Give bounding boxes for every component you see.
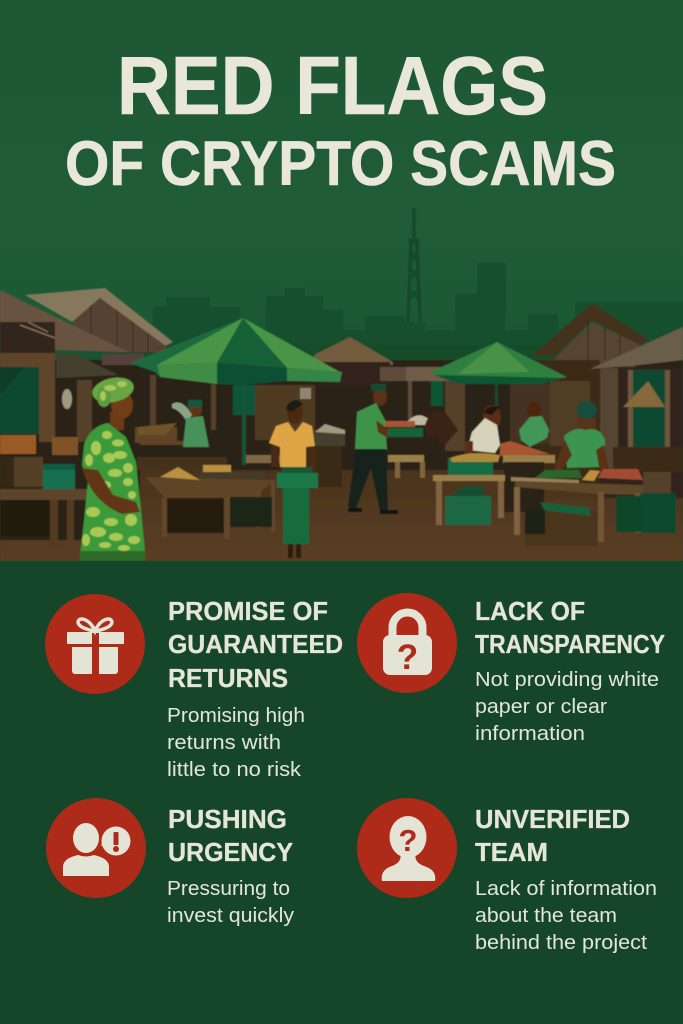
icon: person with alert (46, 798, 146, 898)
centre stall (312, 337, 465, 487)
market scene (0, 208, 683, 561)
icon: padlock (357, 593, 457, 693)
right house (510, 303, 649, 490)
right front house (590, 327, 683, 498)
heading (475, 804, 630, 867)
description: invest quickly (167, 905, 294, 927)
title line 2: OF CRYPTO SCAMS (65, 129, 616, 199)
heading (168, 804, 293, 867)
description (475, 878, 657, 954)
left crates (0, 435, 88, 548)
heading: PROMISE OF (168, 596, 328, 626)
man in yellow shirt (269, 400, 318, 558)
mid vendors and stall (385, 410, 458, 478)
icon: unknown person: ? (399, 823, 417, 858)
title (65, 39, 616, 199)
man in green walking (348, 384, 402, 514)
item: lack of transparency (357, 593, 665, 745)
heading: LACK OF (475, 596, 585, 626)
heading: RETURNS (168, 663, 288, 693)
heading (475, 596, 665, 659)
radio tower (406, 208, 426, 330)
right umbrella (430, 342, 567, 410)
left umbrella (130, 318, 342, 465)
left vendor in green (172, 400, 209, 447)
heading (168, 596, 343, 693)
heading: PUSHING (168, 804, 287, 834)
city skyline (152, 263, 682, 345)
icon: unknown person (357, 798, 457, 898)
background dark band (120, 352, 152, 356)
left back house (25, 288, 173, 352)
icon: padlock: ? (397, 638, 418, 677)
description: Pressuring to (167, 878, 290, 900)
description: behind the project (475, 932, 647, 954)
description (167, 705, 305, 781)
description (167, 878, 294, 927)
market interior shadow (0, 360, 683, 470)
description: information (475, 723, 585, 745)
lower panel background (0, 561, 683, 1024)
title line 1: RED FLAGS (117, 39, 548, 132)
description (475, 669, 659, 745)
description: paper or clear (475, 696, 607, 718)
description: Not providing white (475, 669, 659, 691)
item: unverified team (357, 798, 657, 954)
description: returns with (167, 732, 281, 754)
left centre table with goods (137, 455, 281, 539)
stall interior left (135, 375, 315, 445)
vendors on right (465, 401, 609, 472)
icon: gift (45, 594, 145, 694)
heading: UNVERIFIED (475, 804, 630, 834)
description: about the team (475, 905, 617, 927)
item: promise of guaranteed returns (45, 594, 343, 781)
heading: GUARANTEED (168, 629, 343, 659)
heading: URGENCY (168, 837, 293, 867)
sky background (0, 0, 683, 400)
item: pushing urgency (46, 798, 294, 927)
description: Promising high (167, 705, 305, 727)
ground (0, 470, 683, 561)
description: Lack of information (475, 878, 657, 900)
big woman in patterned dress (80, 374, 145, 561)
left front house (0, 290, 144, 442)
description: little to no risk (167, 759, 302, 781)
right tables with goods (433, 453, 676, 546)
heading: TEAM (475, 837, 548, 867)
